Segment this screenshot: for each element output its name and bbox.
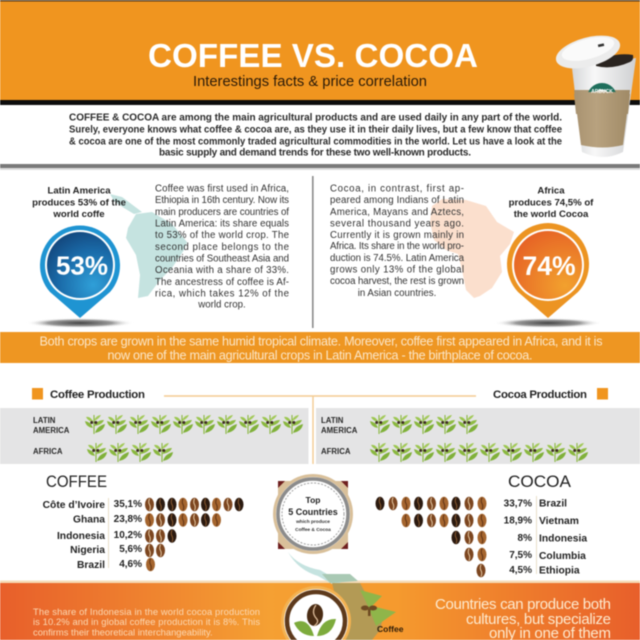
heading: Africa share: the world Cocoa xyxy=(514,209,589,220)
footer text: Indonesia share: The share of Indonesia in the world cocoa production xyxy=(33,606,260,617)
legend: cocoa production: Cocoa Production xyxy=(493,389,587,401)
coffee paragraph: countries of Southeast Asia and xyxy=(155,254,289,264)
country labels: Brazil xyxy=(539,498,567,510)
country labels: Columbia xyxy=(539,551,586,562)
country labels: Indonesia xyxy=(539,534,587,544)
icon: coffee plant xyxy=(361,606,377,616)
coffee paragraph: main producers are countries of xyxy=(155,207,289,218)
country labels: Ghana xyxy=(73,514,105,526)
cocoa paragraph xyxy=(330,184,465,299)
country labels: Ethiopia xyxy=(539,566,580,576)
cocoa paragraph: several thousand years ago. xyxy=(330,218,464,230)
intro text: Surely, everyone knows what coffee & cocoa are, as they use it in their daily lives, but a few know that coffee xyxy=(69,124,562,136)
cocoa paragraph: in Asian countries. xyxy=(358,288,436,299)
cocoa paragraph: peared among Indians of Latin xyxy=(330,195,464,206)
country labels xyxy=(539,498,587,576)
heading: cocoa: COCOA xyxy=(508,473,571,491)
pin: 74%: 74% xyxy=(522,251,576,281)
row labels: AFRICA xyxy=(33,447,63,456)
production header rule xyxy=(164,396,476,464)
percent values: 33,7% xyxy=(504,498,532,510)
pictogram: Africa coffee xyxy=(87,443,173,462)
footer text: Indonesia share: confirms their theoretical interchangeability. xyxy=(33,626,213,638)
country labels: Côte d’Ivoire xyxy=(43,500,105,511)
heading: Africa share: produces 74,5% of xyxy=(509,198,594,208)
percent values: 18,9% xyxy=(504,516,532,526)
section divider xyxy=(0,164,640,170)
title: COFFEE VS. COCOA xyxy=(148,37,478,74)
row labels: AFRICA xyxy=(321,447,351,456)
row labels: LATIN xyxy=(321,416,344,425)
intro text: basic supply and demand trends for these two well-known products. xyxy=(159,148,471,158)
badge: top 5 countries xyxy=(273,474,353,554)
coffee paragraph: Coffee was first used in Africa, xyxy=(155,184,289,194)
intro text: & cocoa are one of the most commonly traded agricultural commodities in the world. Let us have a look at the xyxy=(69,136,562,148)
row labels xyxy=(33,416,70,456)
cocoa paragraph: Africa. Its share in the world pro- xyxy=(330,241,464,252)
icon: takeaway coffee cup xyxy=(552,29,636,157)
percent values: 35,1% xyxy=(114,499,142,510)
panel: cocoa share xyxy=(330,184,602,328)
percent values: 4,6% xyxy=(119,559,142,570)
coffee paragraph: second place belongs to the xyxy=(155,242,289,253)
map: Latin America xyxy=(110,194,187,298)
country labels: Brazil xyxy=(77,560,105,571)
center divider xyxy=(312,176,314,328)
pin: 53%: 53% xyxy=(56,250,108,280)
country labels: Indonesia xyxy=(57,531,105,542)
percent values: 23,8% xyxy=(114,514,142,525)
map: Africa xyxy=(430,199,514,298)
header band xyxy=(0,0,640,105)
label: coffee: Coffee xyxy=(377,624,404,634)
logo: bean and leaves xyxy=(281,586,351,640)
orange callout band: Both crops are grown in the same humid tropical climate. Moreover, coffee first appeared in Africa, and it is xyxy=(40,334,602,348)
icon: takeaway coffee cup: ARBUCK xyxy=(591,89,613,95)
country labels xyxy=(43,500,105,571)
row labels: AMERICA xyxy=(321,426,358,435)
cocoa paragraph: Currently it is grown mainly in xyxy=(330,230,464,241)
heading: Africa share xyxy=(509,186,594,220)
bean chart: coffee xyxy=(145,498,244,571)
panel: coffee share xyxy=(26,184,289,328)
heading: Latin America share: Latin America xyxy=(47,186,111,196)
country labels: Nigeria xyxy=(70,545,105,556)
heading: coffee: COFFEE xyxy=(46,473,107,491)
pictogram: Latin America cocoa xyxy=(370,415,478,434)
coffee paragraph: Oceania with a share of 33%. xyxy=(155,265,289,276)
percent values: 10,2% xyxy=(114,530,142,541)
footer text: Indonesia share: is 10.2% and in global coffee production it is 8%. This xyxy=(33,616,260,627)
country labels: Vietnam xyxy=(539,516,579,527)
coffee paragraph: rica, which takes 12% of the xyxy=(155,288,289,300)
panel: top coffee countries xyxy=(43,473,244,571)
cocoa paragraph: America, Mayans and Aztecs, xyxy=(330,207,464,218)
percent values: 4,5% xyxy=(509,565,532,576)
footer text: Indonesia share xyxy=(33,606,260,638)
badge: top 5 countries: Top xyxy=(306,495,320,505)
cocoa paragraph: duction is 74.5%. Latin America xyxy=(330,253,465,264)
percent values: 7,5% xyxy=(509,550,532,561)
coffee paragraph: world crop. xyxy=(197,300,246,310)
intro text xyxy=(69,112,562,158)
footer text: specialization: cultures, but specialize xyxy=(466,611,611,628)
badge: top 5 countries: 5 Countries xyxy=(288,507,338,517)
orange callout band xyxy=(0,332,640,363)
badge: top 5 countries: Coffee & Cocoa xyxy=(295,527,331,533)
row labels: LATIN xyxy=(33,416,56,425)
coffee paragraph: The ancestress of coffee is Af- xyxy=(155,277,289,288)
percent values xyxy=(114,499,142,570)
map: Central and South America xyxy=(288,552,404,640)
row labels: AMERICA xyxy=(33,426,70,435)
heading: Africa share: Africa xyxy=(537,186,565,196)
heading: Latin America share: world coffe xyxy=(52,209,105,220)
subtitle: Interestings facts & price correlation xyxy=(193,73,427,90)
coffee paragraph: to 53% of the world crop. The xyxy=(155,230,289,241)
footer band xyxy=(0,580,640,640)
badge: top 5 countries: which produce xyxy=(295,519,330,525)
footer text: specialization xyxy=(435,596,611,640)
cocoa paragraph: cocoa harvest, the rest is grown xyxy=(330,276,464,287)
percent values: 5,6% xyxy=(119,544,142,555)
heading: Latin America share: produces 53% of the xyxy=(32,198,126,208)
cocoa paragraph: Cocoa, in contrast, first ap- xyxy=(330,184,464,194)
intro text: COFFEE & COCOA are among the main agricultural products and are used daily in any part of the world. xyxy=(69,112,562,124)
coffee paragraph xyxy=(155,184,289,310)
cocoa paragraph: grows only 13% of the global xyxy=(330,264,464,276)
bean chart: cocoa xyxy=(376,497,486,577)
footer text: specialization: Countries can produce both xyxy=(435,596,611,613)
row labels xyxy=(321,416,358,456)
pin: 74% xyxy=(494,223,602,328)
panel: coffee production xyxy=(0,388,308,464)
percent values xyxy=(504,498,532,576)
percent values: 8% xyxy=(518,533,532,544)
panel: cocoa production xyxy=(316,388,640,464)
pin: 53% xyxy=(26,226,134,328)
heading: Latin America share xyxy=(32,186,126,220)
coffee paragraph: Latin America: its share equals xyxy=(155,218,289,230)
legend: coffee production: Coffee Production xyxy=(50,389,145,401)
pictogram: Africa cocoa xyxy=(370,443,588,462)
coffee paragraph: Ethiopia in 16th century. Now its xyxy=(155,195,289,206)
orange callout band: now one of the main agricultural crops in Latin America - the birthplace of cocoa. xyxy=(108,348,532,362)
pictogram: Latin America coffee xyxy=(85,415,303,434)
panel: top cocoa countries xyxy=(376,473,587,577)
